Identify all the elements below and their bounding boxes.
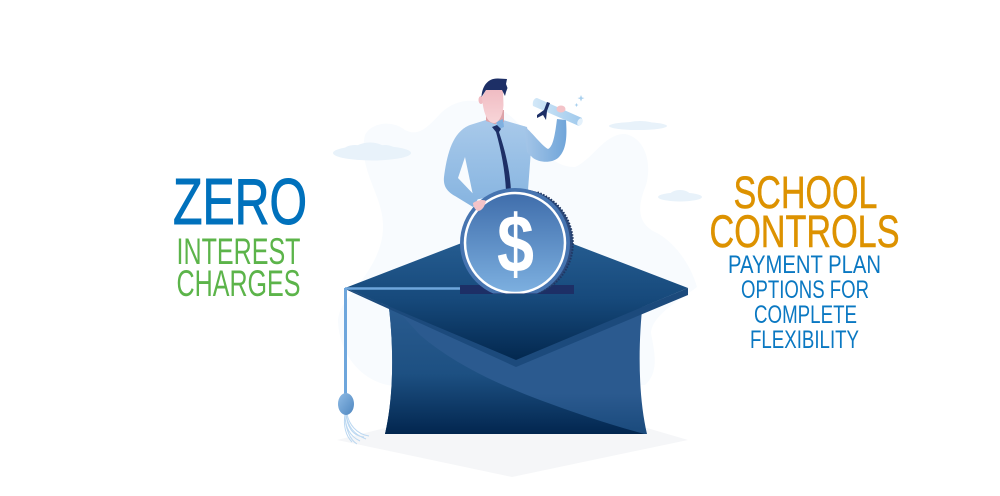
skirt shadow swoosh	[385, 300, 645, 434]
torso and left arm	[444, 120, 531, 207]
body: complete: COMPLETE	[754, 301, 857, 329]
scroll	[533, 98, 582, 126]
person	[444, 78, 584, 207]
right text block	[710, 167, 900, 354]
heading: controls: CONTROLS	[710, 206, 900, 257]
scroll end	[576, 117, 584, 127]
tie	[492, 125, 511, 191]
face	[482, 90, 504, 123]
cap skirt	[385, 300, 647, 434]
coin slot	[460, 285, 574, 294]
tassel knot	[338, 393, 354, 415]
hair	[482, 78, 508, 97]
dollar sign: $	[497, 199, 534, 290]
background blob	[338, 101, 697, 386]
coin	[460, 188, 573, 298]
cloud: right	[658, 190, 702, 202]
body: options for: OPTIONS FOR	[741, 276, 869, 304]
neck	[486, 110, 504, 124]
hand holding diploma	[556, 106, 566, 112]
graduation cap	[338, 222, 688, 444]
heading: zero: ZERO	[173, 165, 307, 238]
raised arm	[524, 119, 566, 162]
tassel threads	[344, 414, 369, 444]
cap board top	[345, 222, 688, 360]
left text block	[173, 165, 307, 304]
subheading: interest: INTEREST	[176, 231, 300, 272]
coin face	[465, 193, 565, 293]
collar	[496, 119, 504, 129]
diploma	[533, 98, 584, 127]
body: flexibility: FLEXIBILITY	[750, 326, 859, 354]
cloud: left	[333, 142, 411, 160]
hand on coin	[473, 200, 486, 211]
sparkles	[574, 95, 584, 107]
ear	[478, 96, 484, 104]
cloud: top right	[609, 121, 667, 130]
tassel string	[344, 288, 347, 396]
coin rim	[528, 190, 573, 294]
ground shadow	[337, 428, 688, 477]
heading: school: SCHOOL	[734, 167, 878, 218]
coin front	[460, 188, 570, 298]
cap board edge	[345, 288, 688, 367]
ribbon	[537, 102, 550, 120]
subheading: charges: CHARGES	[176, 263, 300, 304]
body: payment plan: PAYMENT PLAN	[728, 251, 881, 279]
tassel cord	[345, 287, 460, 290]
